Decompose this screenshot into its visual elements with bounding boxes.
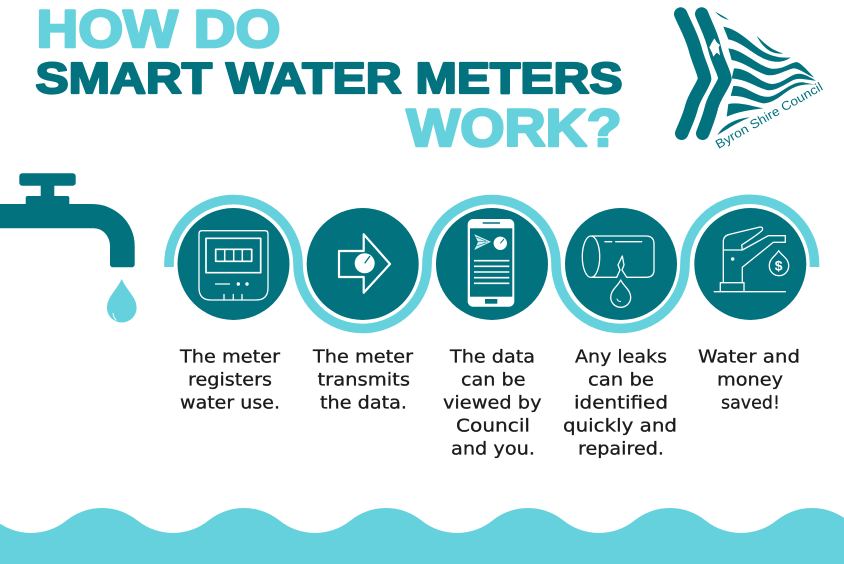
icon: tap with drop	[0, 173, 137, 322]
step 1 text: registers	[188, 370, 272, 390]
step 1 text: water use.	[180, 392, 280, 414]
step 4 text: identified	[574, 392, 668, 414]
logo mark	[681, 12, 817, 135]
step 5 text	[698, 346, 800, 414]
step 3 text	[443, 346, 542, 460]
step 2 text	[312, 346, 414, 414]
step 4 text: quickly and	[563, 416, 677, 436]
step 4 text	[563, 346, 677, 460]
water waves	[0, 508, 844, 564]
step 4: leaking pipe icon	[565, 208, 677, 320]
step 3: phone icon	[436, 208, 548, 320]
step 1: meter icon	[178, 208, 290, 320]
step 3 text: can be	[461, 370, 526, 390]
step 5 text: money	[717, 370, 783, 390]
step 5: faucet with dollar drop icon: $	[775, 258, 783, 274]
ribbon connecting steps	[169, 199, 814, 328]
step 2 text: the data.	[320, 392, 407, 414]
title: WORK?	[406, 99, 622, 158]
logo: Byron Shire Council	[681, 12, 825, 152]
title	[36, 0, 622, 158]
step 3 text: The data	[449, 346, 535, 368]
step 1 text	[179, 346, 281, 414]
step 3 text: and you.	[451, 438, 535, 460]
logo wordmark: Byron Shire Council	[713, 80, 825, 152]
step 1 text: The meter	[179, 346, 281, 368]
step 2: transmit arrow icon	[307, 208, 419, 320]
water drop	[107, 279, 137, 322]
step 5: faucet with dollar drop icon	[694, 208, 806, 320]
step 4 text: can be	[588, 370, 654, 390]
step 4 text: repaired.	[578, 438, 664, 460]
step 5 text: Water and	[698, 346, 800, 368]
title: SMART WATER METERS	[36, 54, 622, 103]
step 4 text: Any leaks	[575, 346, 667, 368]
tap	[0, 173, 135, 267]
step 2 text: transmits	[318, 370, 410, 390]
step 3 text: Council	[456, 416, 530, 436]
step 2 text: The meter	[312, 346, 414, 368]
step 3 text: viewed by	[443, 392, 542, 414]
title: HOW DO	[36, 0, 280, 59]
step 5 text: saved!	[721, 392, 780, 414]
